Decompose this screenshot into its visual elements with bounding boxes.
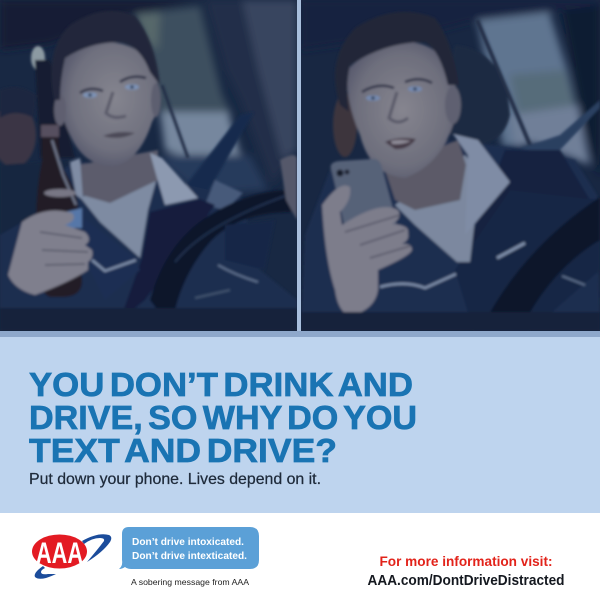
callout: message bubble: Don’t drive intexticated.	[132, 550, 247, 562]
hair	[335, 12, 459, 112]
jacket	[125, 200, 215, 308]
seat belt	[188, 113, 252, 190]
tagline: A sobering message from AAA	[131, 577, 249, 587]
neck	[385, 140, 466, 210]
passenger	[333, 93, 357, 157]
steering wheel	[150, 190, 292, 320]
passenger	[0, 103, 36, 167]
jacket stripes	[380, 274, 456, 288]
heading: DRIVE, SO WHY DO YOU	[29, 400, 417, 437]
collar	[453, 134, 510, 235]
face	[59, 42, 159, 166]
eyes, nose, mouth	[80, 89, 103, 93]
eyes, nose, mouth	[362, 86, 394, 92]
heading: TEXT AND DRIVE?	[29, 433, 337, 470]
panel: photo of driver holding a phone	[301, 0, 600, 345]
heading	[29, 367, 417, 470]
face	[347, 42, 458, 178]
subheading: Put down your phone. Lives depend on it.	[29, 471, 321, 488]
icon: AAA logo	[32, 534, 111, 579]
torso	[302, 140, 600, 312]
icon: AAA logo: AAA	[36, 537, 83, 570]
callout: message bubble	[119, 527, 259, 569]
panel: photo of driver holding a beer bottle	[0, 0, 297, 331]
dashboard	[301, 312, 600, 331]
dashboard	[0, 308, 297, 331]
hand	[8, 210, 92, 295]
steering wheel	[491, 198, 600, 312]
bottle	[36, 124, 82, 297]
collar	[150, 153, 198, 205]
neck and shirt	[80, 178, 157, 258]
torso	[0, 161, 297, 308]
shirt	[395, 155, 480, 262]
heading: YOU DON’T DRINK AND	[29, 367, 413, 404]
phone	[329, 158, 397, 225]
seat belt	[524, 100, 600, 152]
window spot	[31, 46, 45, 70]
hair	[51, 11, 160, 100]
headrest	[450, 53, 512, 145]
callout: more information: For more information visit:	[380, 554, 552, 569]
hand	[322, 185, 412, 316]
callout: more information	[368, 554, 564, 589]
callout: more information: AAA.com/DontDriveDistracted	[368, 573, 564, 589]
callout: message bubble: Don’t drive intoxicated.	[132, 536, 244, 548]
